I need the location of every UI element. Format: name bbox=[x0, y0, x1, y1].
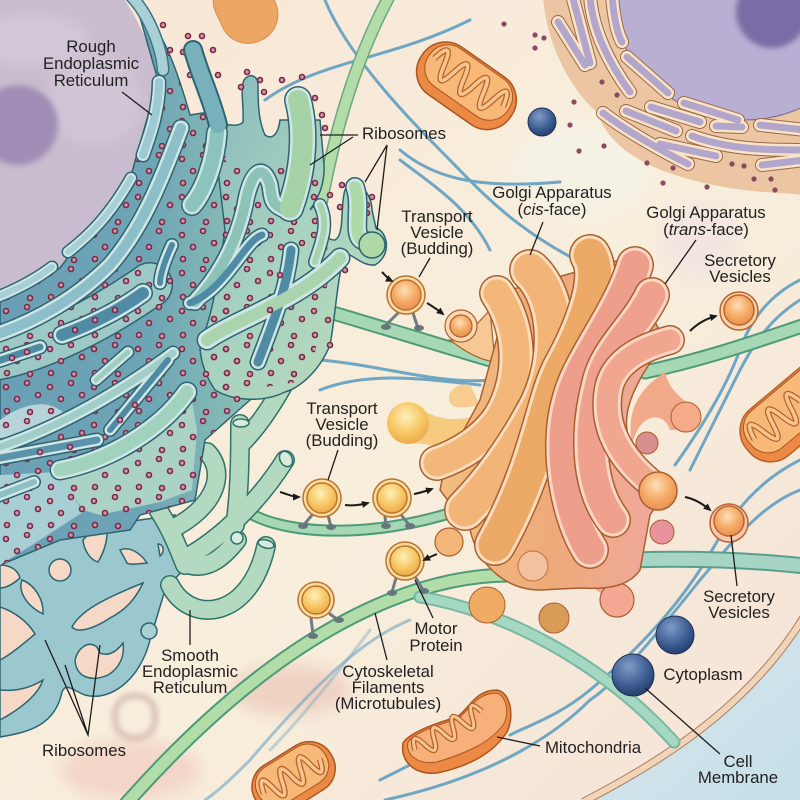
label: Cytoplasm: Cytoplasm bbox=[663, 665, 743, 684]
ER blue base mass bbox=[0, 0, 250, 565]
label: Rough Endoplasmic Reticulum: Endoplasmic bbox=[43, 54, 139, 73]
label: Cytoskeletal Filaments: Cytoskeletal bbox=[342, 662, 434, 681]
golgi trans-side bud bbox=[631, 372, 695, 445]
label: Smooth Endoplasmic Reticulum: Reticulum bbox=[153, 678, 227, 697]
motor protein feet bbox=[298, 324, 429, 639]
label: Transport Vesicle upper: Transport bbox=[401, 207, 473, 226]
sample ribosomes inside dark cisternae bbox=[10, 272, 282, 454]
golgi budding vesicle bbox=[445, 310, 477, 342]
label: Cytoskeletal Filaments: (Microtubules) bbox=[335, 694, 441, 713]
label: Transport Vesicle lower: (Budding) bbox=[306, 431, 378, 450]
label: Secretory Vesicles lower: Secretory bbox=[703, 587, 776, 606]
label: Ribosomes top: Ribosomes bbox=[362, 124, 446, 143]
smooth endoplasmic reticulum: blue network bbox=[0, 515, 192, 737]
cisterna 2 bbox=[465, 270, 554, 510]
transport vesicles with motor proteins bbox=[298, 276, 429, 639]
label: Smooth Endoplasmic Reticulum: Endoplasmic bbox=[142, 662, 238, 681]
label: Transport Vesicle lower: Transport bbox=[306, 399, 378, 418]
golgi apparatus bbox=[387, 255, 701, 633]
panel: left nucleus bbox=[0, 0, 160, 320]
label: Transport Vesicle lower: Vesicle bbox=[315, 415, 369, 434]
ER bud bbox=[359, 232, 385, 258]
golgi lower orange bud bbox=[518, 551, 548, 581]
label: Rough Endoplasmic Reticulum: Rough bbox=[66, 37, 116, 56]
bud bbox=[141, 623, 157, 639]
label: Motor Protein: Motor bbox=[415, 619, 458, 638]
mitochondria bbox=[204, 0, 800, 800]
vesicle bodies bbox=[298, 276, 425, 618]
leader lines bbox=[45, 92, 737, 754]
tube openings bbox=[231, 419, 295, 550]
mitochondrion bottom bbox=[242, 732, 345, 800]
mitochondrion right bbox=[729, 350, 800, 473]
panel: upper right nucleus with rough ER bands bbox=[501, 0, 800, 195]
blue actin filaments bbox=[205, 0, 800, 800]
label: Ribosomes bottom: Ribosomes bbox=[42, 741, 126, 760]
smooth endoplasmic reticulum: green tubes bbox=[150, 382, 295, 610]
mitochondrion top bbox=[204, 0, 287, 53]
label: Smooth Endoplasmic Reticulum: Smooth bbox=[161, 646, 219, 665]
golgi secretory bud bbox=[639, 472, 677, 510]
label: Cytoskeletal Filaments: Filaments bbox=[352, 678, 424, 697]
nucleus bbox=[610, 0, 800, 120]
ER nuclear envelope band bbox=[130, 0, 163, 70]
ER lower green mass bbox=[57, 390, 197, 515]
label: Motor Protein: Protein bbox=[409, 636, 463, 655]
nucleolus bbox=[736, 0, 800, 48]
mitochondrion lower centre bbox=[403, 690, 511, 773]
label: Secretory Vesicles lower: Vesicles bbox=[708, 603, 770, 622]
label: Transport Vesicle upper: Vesicle bbox=[410, 223, 464, 242]
label: Cell Membrane: Membrane bbox=[698, 768, 778, 787]
label: Golgi cis-face: (cis-face) bbox=[517, 200, 587, 219]
golgi buds left and bottom bbox=[405, 310, 639, 617]
ribosome dots near nucleus bbox=[501, 21, 778, 193]
mitochondrion upper centre bbox=[406, 31, 527, 141]
ER capsules, outer rim bbox=[558, 0, 800, 165]
golgi body bbox=[440, 260, 668, 590]
ribosome dots on green lobes bbox=[205, 165, 330, 395]
panel: cell membrane and extracellular space bbox=[583, 615, 800, 800]
rough endoplasmic reticulum bbox=[0, 0, 386, 565]
ER green mass with finger lobes bbox=[200, 76, 386, 399]
label: Golgi cis-face: Golgi Apparatus bbox=[492, 183, 612, 202]
cisterna 3 bbox=[495, 255, 595, 545]
ribosome dots on ER bbox=[0, 0, 250, 565]
cisterna 4 bbox=[564, 265, 635, 550]
free small vesicles bbox=[469, 432, 674, 633]
label: Secretory Vesicles upper: Vesicles bbox=[709, 267, 771, 286]
secretory vesicles bbox=[710, 292, 758, 542]
golgi cisternae stack bbox=[437, 255, 670, 550]
cisterna 1 cis bbox=[437, 293, 516, 463]
motor protein legs bbox=[303, 313, 423, 635]
perinuclear tan body bbox=[543, 0, 800, 195]
ER cisternae, blue and green bbox=[0, 50, 375, 497]
label: Transport Vesicle upper: (Budding) bbox=[401, 239, 473, 258]
cisterna 5 bbox=[591, 295, 652, 520]
label: Cell Membrane: Cell bbox=[724, 752, 752, 771]
arrows bbox=[280, 272, 716, 560]
ER wide pale band bbox=[0, 285, 150, 358]
yellow vesicle bbox=[387, 402, 429, 444]
label: Secretory Vesicles upper: Secretory bbox=[704, 251, 777, 270]
cisterna 6 trans bbox=[607, 340, 670, 490]
label: Golgi trans-face: (trans-face) bbox=[663, 220, 749, 239]
ER lower-left pale patch bbox=[0, 404, 67, 438]
ribosome dots around finger lobes bbox=[160, 22, 374, 348]
label: Golgi trans-face: Golgi Apparatus bbox=[646, 203, 766, 222]
label: Mitochondria: Mitochondria bbox=[545, 738, 642, 757]
label: Rough Endoplasmic Reticulum: Reticulum bbox=[54, 71, 128, 90]
network gaps bbox=[0, 527, 163, 720]
dark blue spheres bbox=[528, 108, 694, 696]
